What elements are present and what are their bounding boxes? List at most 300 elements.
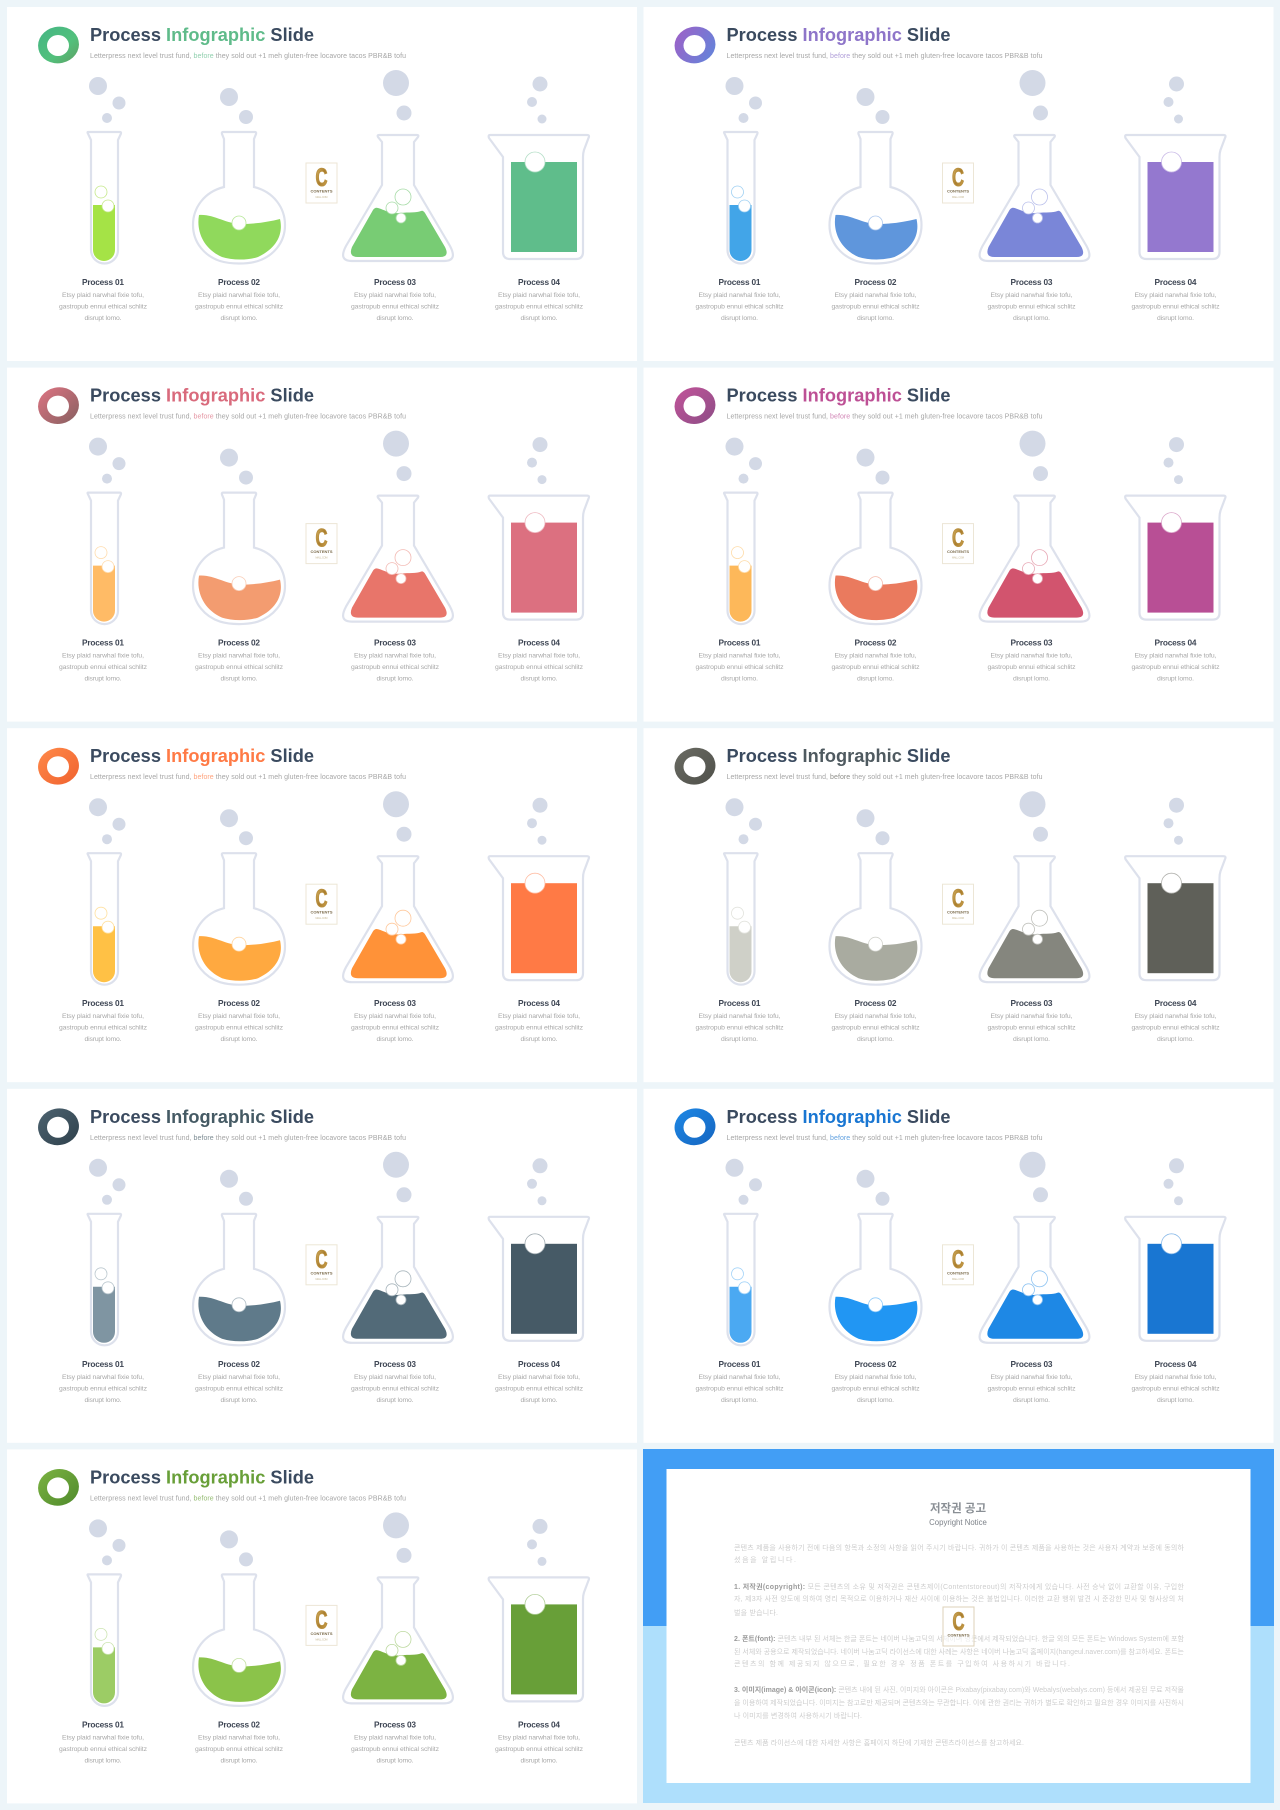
panel: coral process slide bbox=[7, 368, 637, 722]
process 01 text: Etsy plaid narwhal fixie tofu, bbox=[62, 1734, 144, 1741]
process 01 text: Etsy plaid narwhal fixie tofu, bbox=[698, 1013, 781, 1020]
process 04 text bbox=[1132, 998, 1220, 1043]
process 01 text: gastropub ennui ethical schlitz bbox=[59, 1385, 148, 1392]
process 04 text: Process 04 bbox=[1154, 1359, 1197, 1369]
process 01 text: Process 01 bbox=[718, 1359, 761, 1369]
process 04 text: Process 04 bbox=[1154, 277, 1197, 287]
process 02 text: Etsy plaid narwhal fixie tofu, bbox=[198, 1734, 280, 1741]
process 01 text bbox=[59, 998, 148, 1043]
icon: conical flask bbox=[343, 791, 453, 982]
watermark logo: CONTENTS bbox=[310, 1631, 333, 1636]
process 02 text bbox=[195, 638, 284, 683]
process 02 text: Process 02 bbox=[218, 1359, 260, 1369]
process 01 text: disrupt lomo. bbox=[84, 1036, 122, 1043]
process 03 text: Etsy plaid narwhal fixie tofu, bbox=[354, 1734, 436, 1741]
process 01 text bbox=[696, 638, 784, 683]
process 02 text: Process 02 bbox=[218, 638, 260, 648]
intro paragraph bbox=[734, 1543, 1185, 1564]
process 03 text: Process 03 bbox=[1010, 638, 1053, 648]
process 02 text: disrupt lomo. bbox=[220, 315, 258, 322]
process 02 text: disrupt lomo. bbox=[857, 676, 894, 683]
process 04 text: Etsy plaid narwhal fixie tofu, bbox=[1134, 653, 1217, 660]
process 04 text bbox=[495, 277, 584, 322]
watermark logo: CONTENTS bbox=[947, 1270, 969, 1275]
watermark logo: C bbox=[952, 1246, 964, 1274]
process 04 text: Etsy plaid narwhal fixie tofu, bbox=[498, 292, 580, 299]
process 03 text: Process 03 bbox=[374, 638, 416, 648]
heading: copyright notice: Copyright Notice bbox=[929, 1518, 987, 1527]
process 04 text: gastropub ennui ethical schlitz bbox=[495, 304, 584, 310]
icon: test tube bbox=[724, 798, 762, 985]
process 04 text: Process 04 bbox=[1154, 998, 1197, 1008]
process 03 text: disrupt lomo. bbox=[376, 315, 414, 322]
process 01 text: disrupt lomo. bbox=[721, 1036, 758, 1043]
watermark logo: C bbox=[952, 525, 964, 553]
process 02 text: Etsy plaid narwhal fixie tofu, bbox=[834, 653, 917, 660]
subtitle: Letterpress next level trust fund, before they sold out +1 meh gluten-free locavore tacos PBR&B tofu bbox=[726, 53, 1043, 60]
process 01 text: gastropub ennui ethical schlitz bbox=[696, 664, 784, 671]
process 04 text: gastropub ennui ethical schlitz bbox=[1132, 304, 1220, 310]
process 03 text: gastropub ennui ethical schlitz bbox=[988, 1025, 1076, 1032]
process 02 text bbox=[195, 277, 284, 322]
icon: conical flask bbox=[980, 70, 1089, 261]
intro paragraph: 콘텐츠 제품을 사용하기 전에 다음의 항목과 소정의 사항을 읽어 주시기 바랍니다. 귀하가 이 콘텐츠 제품을 사용하는 것은 사용자 계약과 보증에 동의하 bbox=[734, 1543, 1185, 1552]
panel: orange process slide bbox=[7, 728, 637, 1082]
watermark logo: C bbox=[316, 1606, 328, 1634]
process 03 text: disrupt lomo. bbox=[1013, 1397, 1050, 1404]
title: Process Infographic Slide bbox=[90, 1467, 314, 1487]
process 02 text: disrupt lomo. bbox=[220, 1397, 258, 1404]
process 01 text: Process 01 bbox=[718, 638, 761, 648]
icon: round flask bbox=[830, 809, 922, 985]
process 03 text: Process 03 bbox=[1010, 1359, 1053, 1369]
subtitle: Letterpress next level trust fund, before they sold out +1 meh gluten-free locavore tacos PBR&B tofu bbox=[90, 774, 406, 781]
process 03 text: Etsy plaid narwhal fixie tofu, bbox=[354, 292, 436, 299]
icon: round flask bbox=[193, 1170, 285, 1345]
process 04 text: Etsy plaid narwhal fixie tofu, bbox=[498, 1013, 580, 1020]
process 01 text bbox=[696, 1359, 784, 1404]
title: Process Infographic Slide bbox=[726, 386, 950, 406]
watermark logo: MALL.COM bbox=[952, 1278, 964, 1281]
process 04 text: Etsy plaid narwhal fixie tofu, bbox=[1134, 1374, 1217, 1381]
icon: ring logo bbox=[38, 1108, 79, 1145]
process 02 text bbox=[832, 638, 920, 683]
process 03 text: Process 03 bbox=[374, 998, 416, 1008]
process 03 text: gastropub ennui ethical schlitz bbox=[351, 1385, 440, 1392]
process 03 text: Etsy plaid narwhal fixie tofu, bbox=[990, 1374, 1073, 1381]
process 04 text: gastropub ennui ethical schlitz bbox=[495, 1385, 584, 1392]
process 03 text: gastropub ennui ethical schlitz bbox=[988, 1385, 1076, 1392]
icon: beaker bbox=[489, 437, 589, 620]
process 02 text: disrupt lomo. bbox=[220, 676, 258, 683]
icon: test tube bbox=[88, 1519, 126, 1706]
icon: conical flask bbox=[980, 1152, 1089, 1343]
watermark logo: CONTENTS bbox=[947, 188, 969, 194]
process 02 text: gastropub ennui ethical schlitz bbox=[195, 1025, 284, 1032]
watermark logo: C bbox=[952, 885, 964, 913]
section 2: font bbox=[734, 1634, 1185, 1668]
section 2: font: 된 서체와 공용으로 제작되었습니다. 네이버 나눔고딕 라이선스에 대한 사례는 사항은 네이버 나눔고딕 홈페이지(hangeul.naver.com)를 참고하세요. 폰트는 bbox=[734, 1647, 1185, 1656]
process 01 text: Process 01 bbox=[718, 998, 761, 1008]
process 01 text: Process 01 bbox=[82, 277, 124, 287]
process 01 text: gastropub ennui ethical schlitz bbox=[59, 1025, 148, 1032]
process 03 text: gastropub ennui ethical schlitz bbox=[988, 304, 1076, 310]
subtitle: Letterpress next level trust fund, before they sold out +1 meh gluten-free locavore tacos PBR&B tofu bbox=[90, 414, 406, 421]
process 02 text: Etsy plaid narwhal fixie tofu, bbox=[834, 1013, 917, 1020]
watermark logo: C bbox=[316, 1246, 328, 1274]
icon: ring logo bbox=[38, 1469, 79, 1506]
watermark logo bbox=[942, 1245, 974, 1285]
process 01 text: gastropub ennui ethical schlitz bbox=[696, 1025, 784, 1032]
section 1: copyright: 자, 제3자 사전 양도에 의하여 영리 목적으로 이용하거나 재산 사이에 이용하는 것은 불법입니다. 이러한 교환 행위 발견 시 준강한 민사 및 형사상의 처 bbox=[734, 1594, 1184, 1603]
subtitle: Letterpress next level trust fund, before they sold out +1 meh gluten-free locavore tacos PBR&B tofu bbox=[90, 1495, 406, 1502]
process 01 text: disrupt lomo. bbox=[84, 1757, 122, 1764]
icon: round flask bbox=[193, 88, 285, 264]
process 03 text: Etsy plaid narwhal fixie tofu, bbox=[354, 1374, 436, 1381]
watermark logo: MALL.COM bbox=[316, 557, 328, 560]
process 04 text: gastropub ennui ethical schlitz bbox=[495, 1025, 584, 1032]
process 03 text: Etsy plaid narwhal fixie tofu, bbox=[990, 653, 1073, 660]
icon: beaker bbox=[489, 798, 589, 980]
process 02 text: Process 02 bbox=[854, 1359, 897, 1369]
icon: round flask bbox=[830, 88, 922, 264]
process 04 text: Process 04 bbox=[518, 1359, 560, 1369]
watermark logo: C bbox=[316, 525, 328, 553]
process 03 text: Process 03 bbox=[374, 1359, 416, 1369]
section 2: font: 2. 폰트(font): 콘텐츠 내부 된 서체는 한글 폰트는 네이버 나눔고딕의 서체이며 영문에서 제작되었습니다. 한글 외의 모든 폰트는 Windows System에 포함 bbox=[734, 1634, 1185, 1643]
process 01 text: Etsy plaid narwhal fixie tofu, bbox=[62, 292, 144, 299]
process 03 text bbox=[988, 277, 1076, 322]
process 04 text: Process 04 bbox=[518, 998, 560, 1008]
panel: purple process slide bbox=[644, 7, 1274, 361]
process 02 text bbox=[195, 998, 284, 1043]
process 03 text: Etsy plaid narwhal fixie tofu, bbox=[354, 1013, 436, 1020]
watermark logo bbox=[942, 884, 974, 924]
process 01 text bbox=[696, 998, 784, 1043]
process 01 text: Process 01 bbox=[82, 1359, 124, 1369]
process 02 text bbox=[195, 1719, 284, 1764]
section 1: copyright: 벌을 받습니다. bbox=[734, 1608, 778, 1617]
icon: test tube bbox=[724, 438, 762, 624]
process 02 text bbox=[195, 1359, 284, 1404]
process 04 text: gastropub ennui ethical schlitz bbox=[495, 664, 584, 671]
watermark logo: MALL.COM bbox=[316, 917, 328, 920]
process 04 text: Etsy plaid narwhal fixie tofu, bbox=[498, 653, 580, 660]
process 04 text: Etsy plaid narwhal fixie tofu, bbox=[1134, 1013, 1217, 1020]
process 03 text: disrupt lomo. bbox=[376, 1397, 414, 1404]
process 02 text: Process 02 bbox=[218, 277, 260, 287]
watermark logo: MALL.COM bbox=[316, 1638, 328, 1641]
process 01 text bbox=[696, 277, 784, 322]
subtitle: Letterpress next level trust fund, before they sold out +1 meh gluten-free locavore tacos PBR&B tofu bbox=[90, 53, 406, 60]
process 03 text: gastropub ennui ethical schlitz bbox=[351, 304, 440, 310]
process 01 text: gastropub ennui ethical schlitz bbox=[59, 1746, 148, 1753]
title: Process Infographic Slide bbox=[726, 1107, 950, 1127]
watermark logo: CONTENTS bbox=[947, 549, 969, 554]
process 01 text: disrupt lomo. bbox=[84, 676, 122, 683]
process 04 text: gastropub ennui ethical schlitz bbox=[1132, 1025, 1220, 1032]
process 02 text: gastropub ennui ethical schlitz bbox=[195, 304, 284, 310]
process 04 text: disrupt lomo. bbox=[520, 676, 558, 683]
process 03 text bbox=[351, 277, 440, 322]
process 04 text: disrupt lomo. bbox=[1157, 1397, 1194, 1404]
process 02 text: Process 02 bbox=[854, 998, 897, 1008]
watermark logo: CONTENTS bbox=[310, 549, 333, 554]
watermark logo bbox=[942, 163, 974, 203]
icon: round flask bbox=[193, 449, 285, 624]
process 04 text bbox=[495, 998, 584, 1043]
process 04 text bbox=[495, 638, 584, 683]
panel: copyright notice bbox=[643, 1449, 1274, 1803]
watermark logo bbox=[306, 884, 337, 924]
process 04 text: Process 04 bbox=[518, 638, 560, 648]
process 04 text: gastropub ennui ethical schlitz bbox=[1132, 664, 1220, 671]
panel: slate process slide bbox=[7, 1089, 637, 1443]
process 02 text bbox=[832, 277, 920, 322]
process 01 text bbox=[59, 638, 148, 683]
process 01 text bbox=[59, 1719, 148, 1764]
watermark logo: CONTENTS bbox=[310, 910, 333, 915]
watermark logo: C bbox=[316, 885, 328, 913]
process 03 text: disrupt lomo. bbox=[376, 1757, 414, 1764]
title: Process Infographic Slide bbox=[726, 746, 950, 766]
icon: beaker bbox=[1125, 437, 1226, 620]
process 03 text: disrupt lomo. bbox=[1013, 1036, 1050, 1043]
watermark logo: MALL.COM bbox=[952, 557, 964, 560]
process 01 text: gastropub ennui ethical schlitz bbox=[696, 304, 784, 310]
process 03 text: disrupt lomo. bbox=[376, 676, 414, 683]
icon: conical flask bbox=[980, 791, 1089, 982]
icon: test tube bbox=[88, 798, 126, 985]
watermark logo bbox=[306, 163, 337, 203]
title: Process Infographic Slide bbox=[90, 1107, 314, 1127]
process 02 text: gastropub ennui ethical schlitz bbox=[832, 1025, 920, 1032]
process 04 text: disrupt lomo. bbox=[1157, 315, 1194, 322]
process 02 text: Etsy plaid narwhal fixie tofu, bbox=[198, 292, 280, 299]
icon: ring logo bbox=[675, 1108, 715, 1145]
panel: leaf green process slide bbox=[7, 1449, 637, 1803]
process 01 text bbox=[59, 277, 148, 322]
process 04 text: Etsy plaid narwhal fixie tofu, bbox=[1134, 292, 1217, 299]
closing line: 콘텐츠 제품 라이선스에 대한 자세한 사항은 홈페이지 하단에 기재한 콘텐츠라이선스를 참고하세요. bbox=[734, 1738, 1024, 1747]
icon: test tube bbox=[724, 77, 762, 264]
watermark logo: MALL.COM bbox=[316, 1278, 328, 1281]
panel: green process slide bbox=[7, 7, 637, 361]
process 01 text: disrupt lomo. bbox=[84, 1397, 122, 1404]
process 04 text: gastropub ennui ethical schlitz bbox=[495, 1746, 584, 1753]
icon: conical flask bbox=[343, 1512, 453, 1703]
process 03 text: Etsy plaid narwhal fixie tofu, bbox=[990, 292, 1073, 299]
process 02 text: Process 02 bbox=[854, 638, 897, 648]
icon: ring logo bbox=[675, 748, 715, 785]
watermark logo: C bbox=[952, 1608, 964, 1636]
icon: ring logo bbox=[675, 387, 715, 424]
process 01 text: Etsy plaid narwhal fixie tofu, bbox=[62, 1374, 144, 1381]
watermark logo bbox=[943, 1607, 974, 1646]
icon: beaker bbox=[489, 1519, 589, 1701]
process 01 text: Process 01 bbox=[82, 638, 124, 648]
section 3: image and icon: 나 이미지를 변경하여 사용하시기 바랍니다. bbox=[734, 1711, 862, 1720]
section 1: copyright: 1. 저작권(copyright): 모든 콘텐츠의 소유 및 저작권은 콘텐츠제이(Contentstoreout)의 저작자에게 있습니다. 사전 승낙 없이 교환할 이유, 구입한 bbox=[734, 1582, 1185, 1591]
process 03 text: disrupt lomo. bbox=[376, 1036, 414, 1043]
process 02 text: gastropub ennui ethical schlitz bbox=[195, 1385, 284, 1392]
process 04 text: disrupt lomo. bbox=[520, 315, 558, 322]
process 01 text: gastropub ennui ethical schlitz bbox=[696, 1385, 784, 1392]
process 03 text: Etsy plaid narwhal fixie tofu, bbox=[354, 653, 436, 660]
process 04 text bbox=[1132, 277, 1220, 322]
icon: conical flask bbox=[343, 1152, 453, 1343]
process 04 text: disrupt lomo. bbox=[520, 1757, 558, 1764]
process 03 text: Process 03 bbox=[374, 277, 416, 287]
process 04 text: Process 04 bbox=[1154, 638, 1197, 648]
subtitle: Letterpress next level trust fund, before they sold out +1 meh gluten-free locavore tacos PBR&B tofu bbox=[90, 1135, 406, 1142]
process 01 text: Etsy plaid narwhal fixie tofu, bbox=[62, 1013, 144, 1020]
process 03 text: Process 03 bbox=[1010, 998, 1053, 1008]
process 04 text: Process 04 bbox=[518, 1719, 560, 1729]
section 3: image and icon bbox=[734, 1685, 1185, 1720]
process 04 text bbox=[1132, 638, 1220, 683]
process 03 text: gastropub ennui ethical schlitz bbox=[351, 1025, 440, 1032]
process 02 text: Etsy plaid narwhal fixie tofu, bbox=[834, 292, 917, 299]
watermark logo: C bbox=[952, 164, 964, 192]
process 01 text: gastropub ennui ethical schlitz bbox=[59, 664, 148, 671]
process 01 text: Etsy plaid narwhal fixie tofu, bbox=[698, 653, 781, 660]
process 01 text: disrupt lomo. bbox=[721, 1397, 758, 1404]
icon: round flask bbox=[830, 1170, 922, 1345]
process 01 text: Etsy plaid narwhal fixie tofu, bbox=[698, 1374, 781, 1381]
process 03 text: Etsy plaid narwhal fixie tofu, bbox=[990, 1013, 1073, 1020]
icon: ring logo bbox=[38, 748, 79, 785]
process 02 text: gastropub ennui ethical schlitz bbox=[832, 664, 920, 671]
process 01 text: gastropub ennui ethical schlitz bbox=[59, 304, 148, 310]
process 01 text: Process 01 bbox=[82, 1719, 124, 1729]
process 02 text: Etsy plaid narwhal fixie tofu, bbox=[198, 1374, 280, 1381]
process 04 text bbox=[495, 1359, 584, 1404]
process 02 text: Etsy plaid narwhal fixie tofu, bbox=[834, 1374, 917, 1381]
icon: test tube bbox=[88, 1159, 126, 1345]
process 04 text: Process 04 bbox=[518, 277, 560, 287]
process 04 text: disrupt lomo. bbox=[520, 1036, 558, 1043]
subtitle: Letterpress next level trust fund, before they sold out +1 meh gluten-free locavore tacos PBR&B tofu bbox=[726, 774, 1043, 781]
icon: ring logo bbox=[38, 27, 79, 63]
process 01 text: Process 01 bbox=[718, 277, 761, 287]
title: Process Infographic Slide bbox=[90, 386, 314, 406]
icon: round flask bbox=[830, 449, 922, 624]
process 02 text: disrupt lomo. bbox=[857, 1397, 894, 1404]
subtitle: Letterpress next level trust fund, before they sold out +1 meh gluten-free locavore tacos PBR&B tofu bbox=[726, 414, 1043, 421]
process 02 text: disrupt lomo. bbox=[220, 1036, 258, 1043]
process 03 text bbox=[988, 1359, 1076, 1404]
icon: test tube bbox=[88, 77, 126, 264]
section 2: font: 콘텐츠의 함께 제공되지 않으므로, 필요한 경우 정품 폰트를 구입하여 사용하시기 바랍니다. bbox=[734, 1659, 1070, 1668]
icon: conical flask bbox=[980, 431, 1089, 622]
section 1: copyright bbox=[734, 1582, 1185, 1617]
process 02 text: disrupt lomo. bbox=[857, 315, 894, 322]
process 03 text: gastropub ennui ethical schlitz bbox=[988, 664, 1076, 671]
process 02 text: Process 02 bbox=[218, 1719, 260, 1729]
icon: conical flask bbox=[343, 70, 453, 261]
process 03 text bbox=[351, 1359, 440, 1404]
process 02 text: gastropub ennui ethical schlitz bbox=[832, 304, 920, 310]
panel: magenta process slide bbox=[644, 368, 1274, 722]
process 02 text: Process 02 bbox=[854, 277, 897, 287]
process 01 text: disrupt lomo. bbox=[84, 315, 122, 322]
intro paragraph: 셨음을 알립니다. bbox=[734, 1555, 796, 1564]
process 04 text: Etsy plaid narwhal fixie tofu, bbox=[498, 1374, 580, 1381]
section 3: image and icon: 을 이용하여 제작되었습니다. 이미지는 참고로만 제공되며 콘텐츠와는 무관합니다. 이에 관한 권리는 귀하가 별도로 확인하고 필요한 경우 이미지를 사진하시 bbox=[734, 1698, 1184, 1707]
process 03 text: Process 03 bbox=[374, 1719, 416, 1729]
title: Process Infographic Slide bbox=[726, 25, 950, 45]
watermark logo bbox=[306, 1245, 337, 1285]
watermark logo: MALL.COM bbox=[952, 196, 964, 199]
icon: beaker bbox=[489, 76, 589, 259]
process 02 text: Process 02 bbox=[218, 998, 260, 1008]
process 03 text: disrupt lomo. bbox=[1013, 315, 1050, 322]
process 02 text: disrupt lomo. bbox=[857, 1036, 894, 1043]
process 01 text: disrupt lomo. bbox=[721, 676, 758, 683]
icon: test tube bbox=[88, 438, 126, 624]
process 02 text: Etsy plaid narwhal fixie tofu, bbox=[198, 653, 280, 660]
icon: beaker bbox=[1125, 798, 1226, 980]
process 02 text: gastropub ennui ethical schlitz bbox=[195, 664, 284, 671]
icon: ring logo bbox=[675, 27, 715, 63]
icon: round flask bbox=[193, 809, 285, 985]
process 03 text bbox=[351, 998, 440, 1043]
watermark logo: CONTENTS bbox=[310, 1270, 333, 1275]
heading: copyright notice: 저작권 공고 bbox=[930, 1501, 986, 1515]
process 03 text bbox=[351, 638, 440, 683]
icon: round flask bbox=[193, 1530, 285, 1706]
process 02 text bbox=[832, 998, 920, 1043]
process 02 text: Etsy plaid narwhal fixie tofu, bbox=[198, 1013, 280, 1020]
process 04 text bbox=[1132, 1359, 1220, 1404]
process 01 text: Etsy plaid narwhal fixie tofu, bbox=[698, 292, 781, 299]
process 02 text: gastropub ennui ethical schlitz bbox=[832, 1385, 920, 1392]
title: Process Infographic Slide bbox=[90, 25, 314, 45]
watermark logo: CONTENTS bbox=[947, 910, 969, 915]
process 01 text: Etsy plaid narwhal fixie tofu, bbox=[62, 653, 144, 660]
watermark logo: MALL.COM bbox=[316, 196, 328, 199]
process 03 text: gastropub ennui ethical schlitz bbox=[351, 1746, 440, 1753]
icon: beaker bbox=[1125, 76, 1226, 259]
process 04 text: Etsy plaid narwhal fixie tofu, bbox=[498, 1734, 580, 1741]
panel: blue process slide bbox=[644, 1089, 1274, 1443]
process 04 text: gastropub ennui ethical schlitz bbox=[1132, 1385, 1220, 1392]
section 3: image and icon: 3. 이미지(image) & 아이콘(icon): 콘텐츠 내에 된 사진, 이미지와 아이콘은 Pixabay(pixabay.com)와 Webalys(webalys.com) 등에서 제공된 무료 저작물 bbox=[734, 1685, 1185, 1694]
watermark logo bbox=[942, 524, 974, 564]
process 02 text bbox=[832, 1359, 920, 1404]
process 01 text: disrupt lomo. bbox=[721, 315, 758, 322]
watermark logo: MALL.COM bbox=[952, 917, 964, 920]
panel: grey process slide bbox=[644, 728, 1274, 1082]
process 04 text: disrupt lomo. bbox=[1157, 676, 1194, 683]
icon: beaker bbox=[489, 1158, 589, 1341]
watermark logo: CONTENTS bbox=[310, 188, 333, 194]
process 01 text: Process 01 bbox=[82, 998, 124, 1008]
title: Process Infographic Slide bbox=[90, 746, 314, 766]
process 04 text: disrupt lomo. bbox=[520, 1397, 558, 1404]
watermark logo bbox=[306, 524, 337, 564]
process 03 text bbox=[988, 638, 1076, 683]
process 02 text: gastropub ennui ethical schlitz bbox=[195, 1746, 284, 1753]
icon: conical flask bbox=[343, 431, 453, 622]
process 03 text bbox=[988, 998, 1076, 1043]
process 04 text: disrupt lomo. bbox=[1157, 1036, 1194, 1043]
icon: test tube bbox=[724, 1159, 762, 1345]
process 03 text: Process 03 bbox=[1010, 277, 1053, 287]
process 03 text: disrupt lomo. bbox=[1013, 676, 1050, 683]
icon: ring logo bbox=[38, 387, 79, 424]
